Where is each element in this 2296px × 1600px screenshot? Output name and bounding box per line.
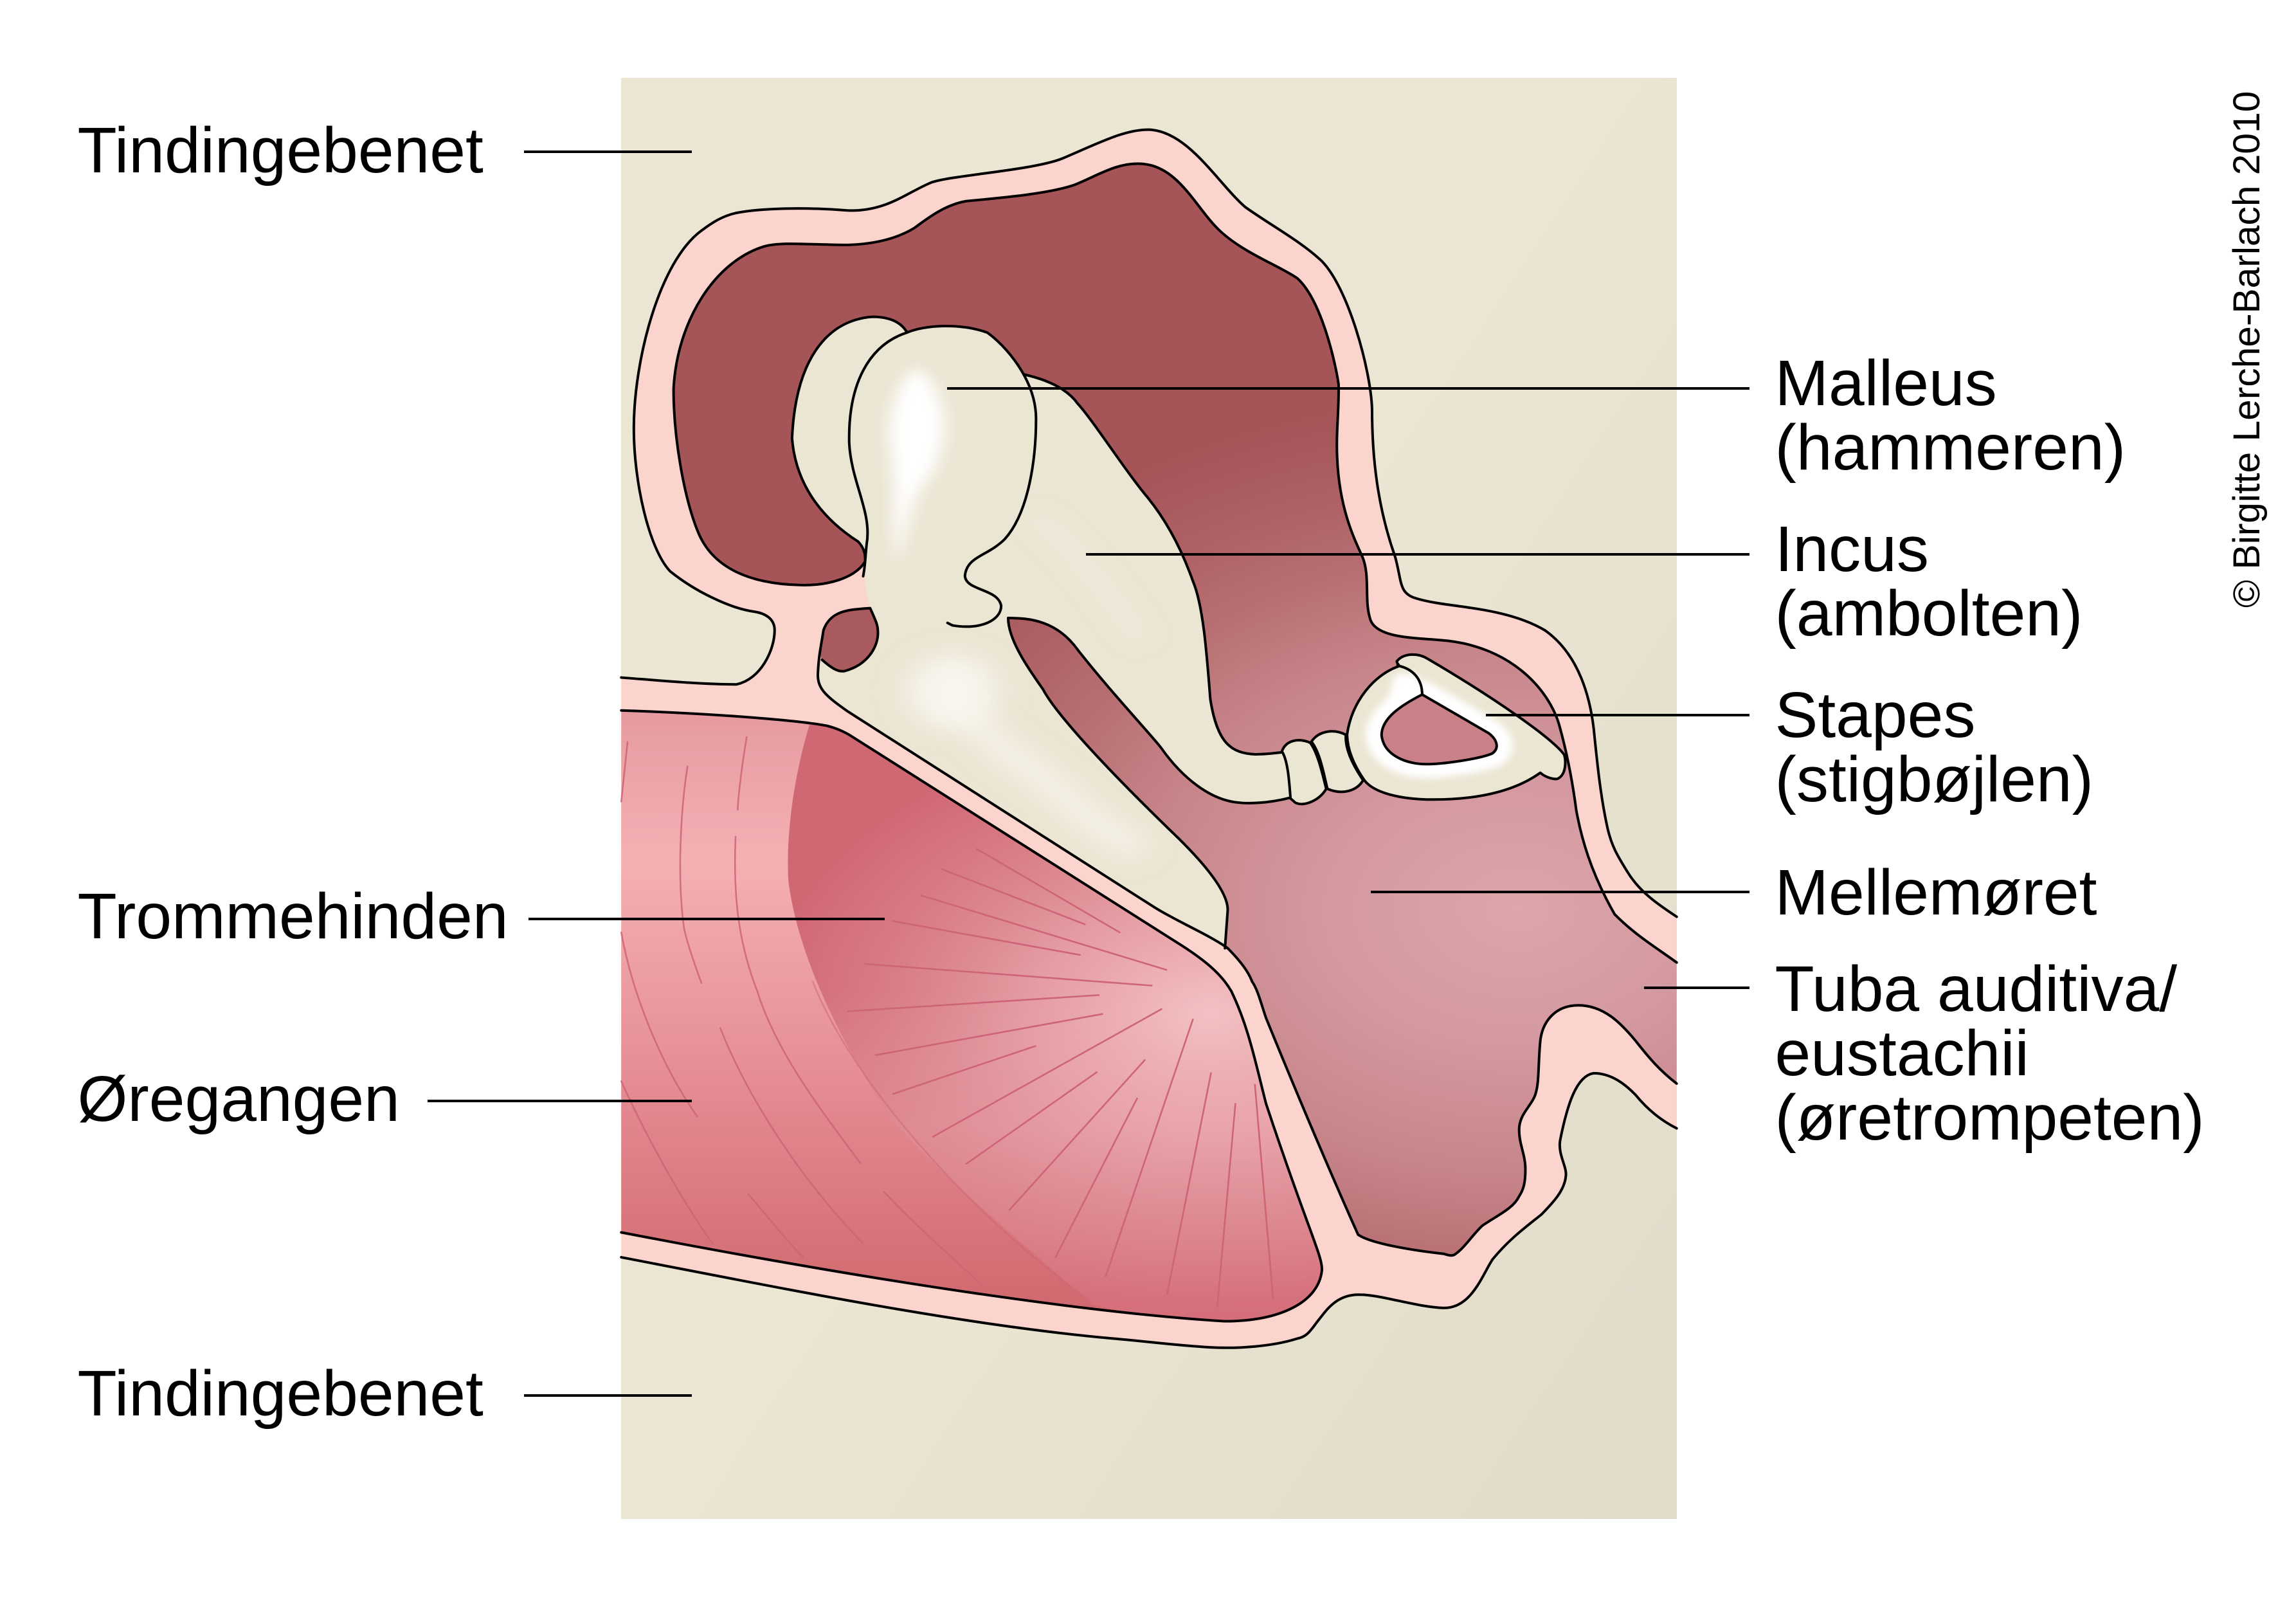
eardrum	[788, 725, 1322, 1322]
label: Stapes: Stapes	[1775, 679, 1975, 751]
label: Malleus: (hammeren)	[1775, 412, 2126, 484]
ear canal	[621, 711, 1322, 1322]
middle ear cavity	[674, 164, 1677, 1255]
incus (anvil)	[792, 317, 1290, 803]
label: Incus: (ambolten)	[1775, 577, 2083, 650]
mucosa lining	[621, 130, 1677, 1348]
middle ear cavity and ossicles	[674, 164, 1677, 1255]
label: Mellemøret: Mellemøret	[1775, 857, 2097, 929]
label: Tindingebenet (top): Tindingebenet	[77, 114, 484, 186]
stapes highlight	[1382, 673, 1497, 764]
label: Tuba auditiva: eustachii	[1775, 1017, 2029, 1089]
stapes opening	[1382, 695, 1497, 764]
ear canal and eardrum	[621, 711, 1322, 1322]
label: Stapes	[1486, 679, 2093, 815]
copyright: © Birgitte Lerche-Barlach 2010	[2226, 91, 2268, 608]
label: Incus	[1086, 513, 2083, 650]
eardrum radial fibres	[813, 849, 1273, 1307]
label: Malleus: Malleus	[1775, 347, 1997, 419]
ear canal skin lines	[621, 737, 982, 1285]
ear canal outline	[621, 711, 1322, 1322]
ossicle joint beads	[1282, 731, 1363, 804]
label: Trommehinden: Trommehinden	[77, 880, 509, 952]
label: Tuba auditiva: Tuba auditiva/	[1775, 953, 2177, 1025]
label: Tindingebenet (bottom): Tindingebenet	[77, 1358, 484, 1430]
stapes (stirrup)	[1282, 655, 1565, 804]
attic recess	[820, 608, 878, 671]
label: Tuba auditiva: (øretrompeten)	[1775, 1082, 2205, 1154]
label: Incus: Incus	[1775, 513, 1929, 585]
label: Stapes: (stigbøjlen)	[1775, 743, 2093, 815]
label: Tuba auditiva	[1644, 953, 2205, 1154]
label: Øregangen: Øregangen	[77, 1063, 400, 1135]
eardrum light centre	[788, 725, 1322, 1322]
panel: temporal bone cross-section	[621, 78, 1677, 1519]
malleus (hammer)	[818, 326, 1228, 948]
stapes ring	[1347, 655, 1565, 799]
label: Malleus	[947, 347, 2126, 484]
